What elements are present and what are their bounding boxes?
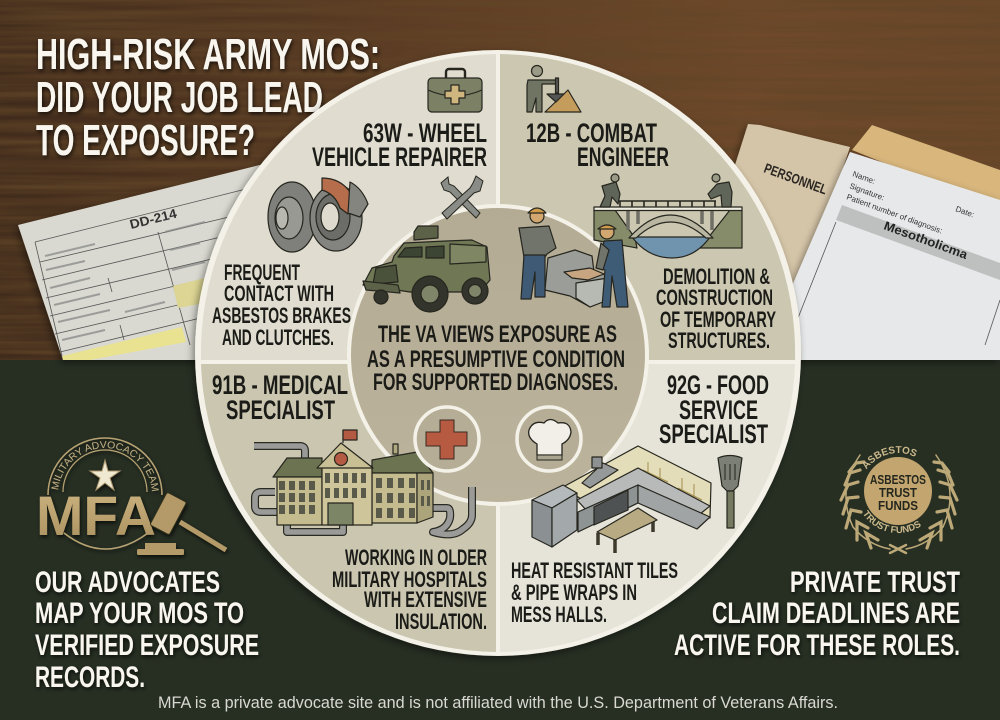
panel: 92G quadrant [500, 364, 795, 652]
wood desk background [0, 0, 1000, 360]
text: center statement [367, 321, 625, 396]
document: diagnosis sheet [760, 152, 1000, 360]
heading: 91B: 91B - MEDICAL [212, 370, 348, 400]
text: center statement: FOR SUPPORTED DIAGNOSES. [373, 369, 618, 396]
icon: workers at sheet-metal machine [519, 208, 628, 307]
heading: 91B [212, 370, 348, 425]
icon: chef hat badge [517, 407, 581, 471]
heading: 63W: VEHICLE REPAIRER [312, 142, 487, 172]
text: 92G description [511, 558, 678, 627]
icon: briefcase [428, 69, 482, 112]
text: advocates statement: MAP YOUR MOS TO [35, 597, 244, 630]
text: advocates statement: OUR ADVOCATES [35, 566, 220, 599]
icon: engineer with shovel [527, 66, 581, 112]
text: 92G description: MESS HALLS. [511, 602, 607, 627]
text: advocates statement: RECORDS. [35, 661, 145, 694]
panel: 12B quadrant [500, 54, 795, 360]
logo: asbestos trust funds seal: ASBESTOS [863, 446, 917, 470]
text: 63W description: AND CLUTCHES. [222, 325, 334, 350]
heading: 92G: 92G - FOOD [667, 370, 769, 400]
icon: brake disc and caliper [268, 178, 368, 252]
icon: bridge with workers [594, 174, 742, 258]
text: 63W description: CONTACT WITH [224, 281, 334, 306]
document: diagnosis sheet: Signature: [848, 181, 886, 202]
icon: crossed wrenches [441, 176, 483, 219]
text: 63W description [212, 260, 351, 350]
text: 63W description: FREQUENT [224, 260, 300, 285]
heading: 92G: SPECIALIST [659, 419, 768, 449]
logo: MFA gavel badge: MFA [36, 484, 156, 547]
text: 91B description: WORKING IN OLDER [345, 545, 487, 570]
title [36, 30, 380, 165]
heading: 91B: SPECIALIST [226, 395, 335, 425]
icon: medical cross badge [415, 407, 479, 471]
icon: kitchen [532, 446, 711, 553]
document: diagnosis sheet: Name: [851, 169, 877, 186]
text: 91B description: INSULATION. [395, 609, 487, 634]
text: 92G description: HEAT RESISTANT TILES [511, 558, 678, 583]
logo: asbestos trust funds seal: TRUST [879, 485, 917, 500]
heading: 92G: SERVICE [679, 395, 758, 425]
panel: 91B quadrant [201, 364, 496, 652]
heading: 63W: 63W - WHEEL [363, 118, 487, 148]
logo: asbestos trust funds seal [839, 446, 959, 554]
text: 91B description: WITH EXTENSIVE [364, 587, 487, 612]
heading: 12B [526, 118, 669, 172]
text: trust deadlines statement [674, 566, 960, 662]
pipes fill [254, 446, 472, 534]
dark green lower band [0, 360, 1000, 720]
title: HIGH-RISK ARMY MOS: [36, 30, 380, 79]
heading: 12B: 12B - COMBAT [526, 118, 657, 148]
logo: MFA gavel badge: MILITARY ADVOCACY TEAM [51, 441, 159, 492]
document: diagnosis sheet: Date: [954, 204, 975, 219]
text: 63W description: ASBESTOS BRAKES [212, 303, 351, 328]
heading: 92G [659, 370, 769, 449]
pipes outline [254, 446, 472, 534]
text: 91B description [332, 545, 487, 634]
text: center statement: THE VA VIEWS EXPOSURE AS [378, 321, 617, 348]
worker left [519, 208, 556, 299]
document: personnel folder: PERSONNEL [762, 160, 830, 198]
panel: 63W quadrant [201, 54, 496, 360]
document: DD-214 form [18, 155, 345, 360]
icon: armored vehicle [363, 226, 490, 312]
icon: hospital with pipes [254, 430, 472, 534]
text: advocates statement [35, 566, 259, 694]
panel: center circle [349, 206, 647, 504]
heading: 12B: ENGINEER [577, 142, 669, 172]
text: 12B description: DEMOLITION & [663, 264, 770, 289]
title: DID YOUR JOB LEAD [36, 73, 323, 122]
central wheel [195, 50, 801, 656]
logo: MFA gavel badge [36, 437, 228, 558]
text: 12B description: STRUCTURES. [668, 328, 770, 353]
text: 12B description [656, 264, 776, 353]
text: 12B description: OF TEMPORARY [660, 307, 776, 332]
document: diagnosis sheet: Mesotholicma [882, 219, 970, 262]
text: advocates statement: VERIFIED EXPOSURE [35, 629, 259, 662]
text: 91B description: MILITARY HOSPITALS [332, 567, 487, 592]
document: personnel folder [735, 124, 850, 300]
worker right [596, 225, 628, 307]
footer disclaimer: MFA is a private advocate site and is not affiliated with the U.S. Department of Veterans Affairs. [158, 694, 838, 712]
document: DD-214 form: DD-214 [128, 206, 179, 232]
logo: asbestos trust funds seal: ASBESTOS [870, 472, 926, 487]
logo: asbestos trust funds seal: TRUST FUNDS [864, 510, 921, 534]
text: center statement: AS A PRESUMPTIVE CONDITION [367, 346, 625, 373]
document: manila folder [852, 125, 1000, 210]
text: 92G description: & PIPE WRAPS IN [511, 580, 637, 605]
icon: spatula [718, 456, 742, 528]
title: TO EXPOSURE? [36, 116, 255, 165]
document: diagnosis sheet: Patient number of diagnosis: [845, 192, 944, 236]
heading: 63W [312, 118, 487, 172]
text: 12B description: CONSTRUCTION [656, 285, 773, 310]
logo: asbestos trust funds seal: FUNDS [878, 498, 918, 513]
